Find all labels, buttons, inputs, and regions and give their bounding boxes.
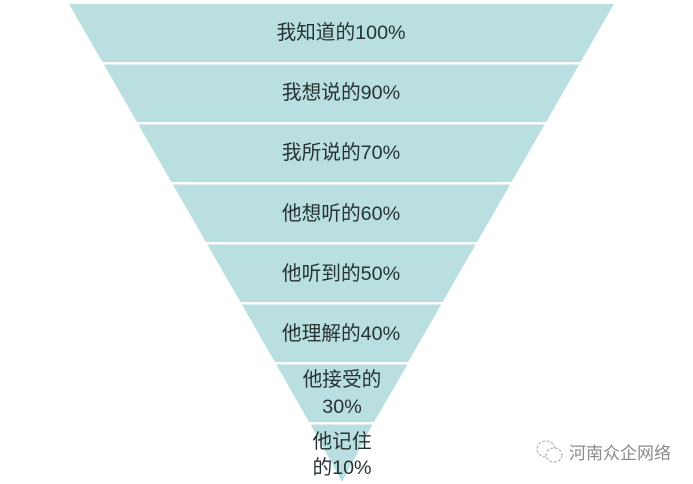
level: 90% (104, 64, 579, 122)
level: 50% (207, 244, 476, 302)
level: 100%: 我知道的100% (276, 22, 406, 44)
level: 50%: 他听到的50% (282, 263, 400, 285)
level: 40%: 他理解的40% (282, 323, 400, 345)
level: 60%: 他想听的60% (282, 203, 400, 225)
level: 30%: 30% (322, 396, 362, 418)
level: 10%: 的10% (312, 457, 372, 479)
level: 60% (173, 184, 510, 242)
watermark (537, 441, 671, 463)
level: 10%: 他记住 (312, 431, 372, 453)
level: 30% (276, 364, 408, 422)
level: 40% (242, 304, 441, 362)
level: 100% (69, 4, 614, 62)
level: 70% (138, 124, 545, 182)
icon: chat bubbles (537, 441, 562, 462)
inverted pyramid chart (69, 4, 614, 482)
watermark text: 河南众企网络 (569, 444, 671, 463)
level: 30%: 他接受的 (303, 369, 381, 391)
level: 90%: 我想说的90% (282, 82, 400, 104)
level: 10% (310, 424, 372, 482)
level: 70%: 我所说的70% (282, 142, 400, 164)
